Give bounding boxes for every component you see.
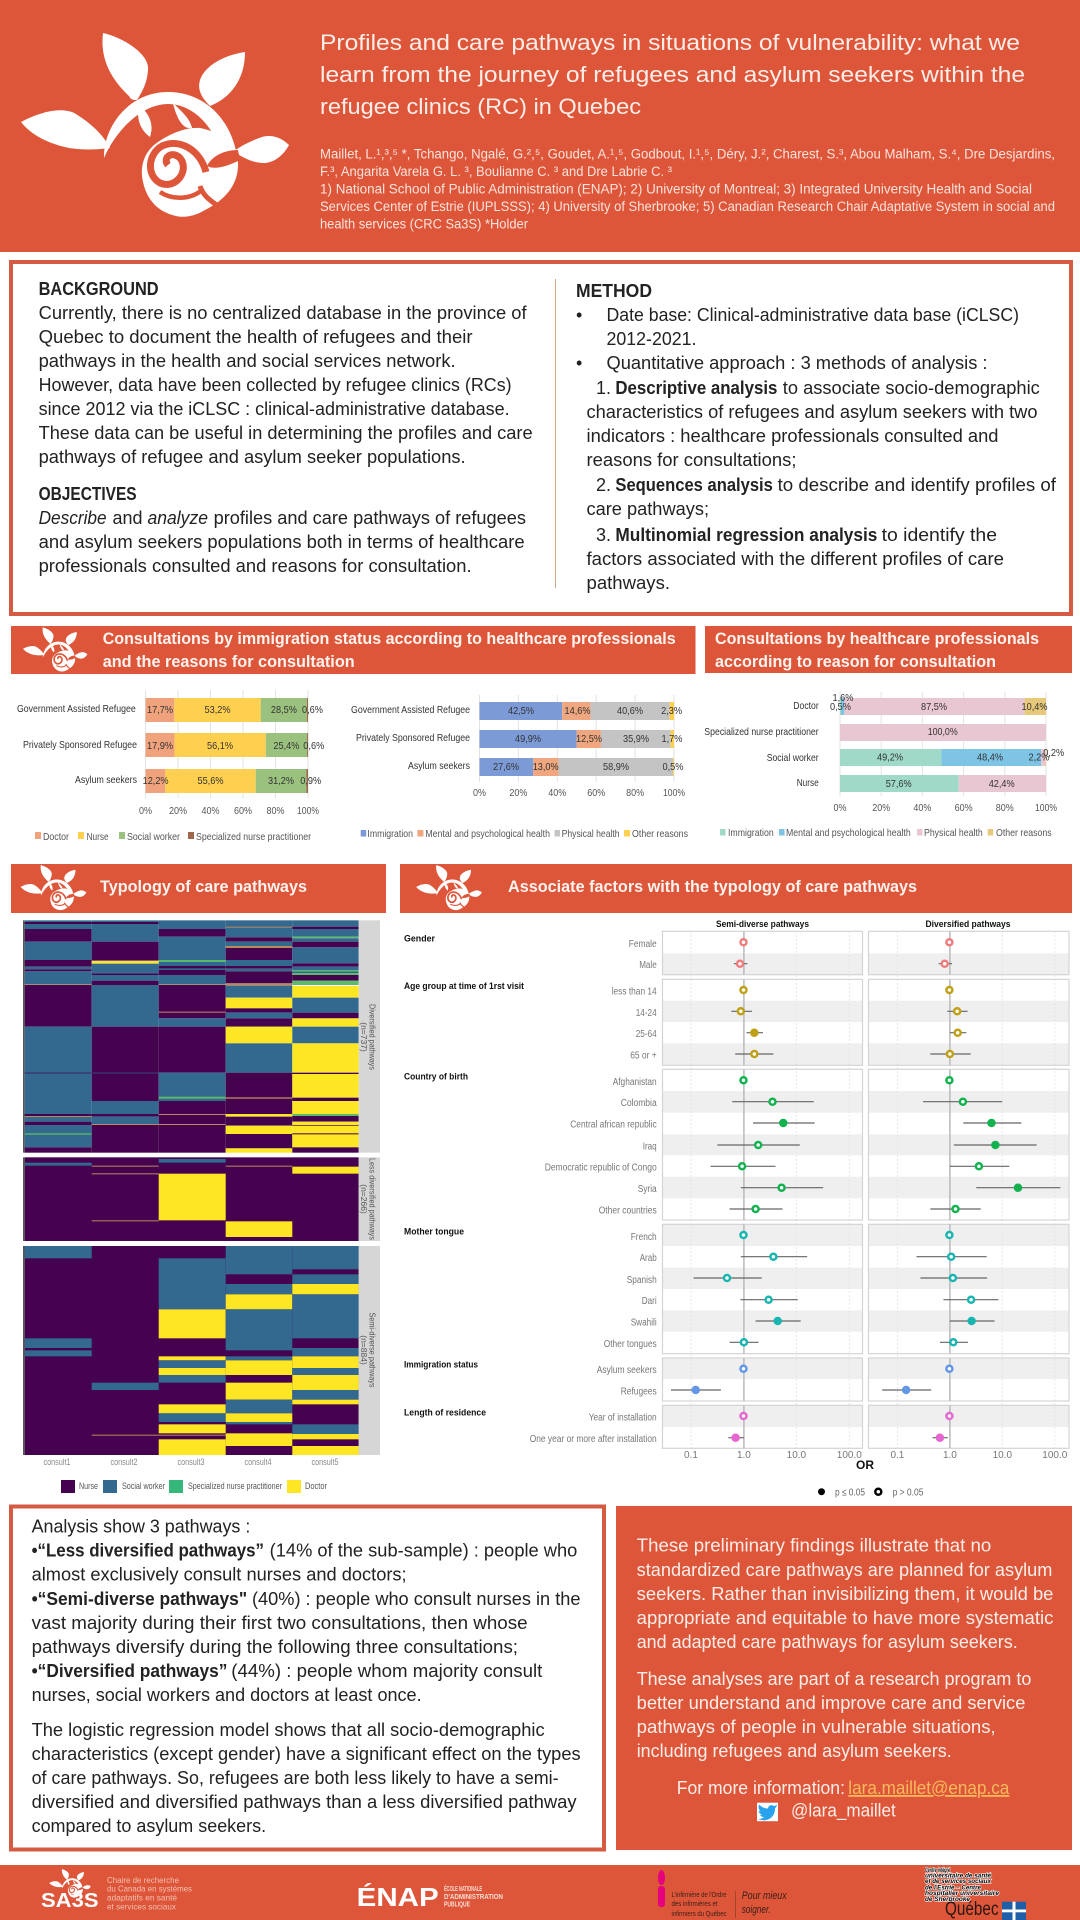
legend: Social worker (127, 831, 180, 843)
heatmap legend: Nurse (79, 1481, 98, 1492)
bar chart: healthcare professional by reason for consultation: 100% (1035, 802, 1057, 814)
significance legend: p ≤ 0.05 (835, 1488, 865, 1499)
text block: preliminary findings: appropriate and equitable to have more systematic (637, 1608, 1053, 1628)
bar chart: healthcare professional by reason for consultation: 48,4% (977, 752, 1003, 764)
group headings: Length of residence (404, 1407, 486, 1418)
row labels (530, 939, 657, 1445)
bar chart: immigration status by healthcare professional: 12,2% (143, 775, 169, 787)
authors and affiliations: 1) National School of Public Administration (ENAP); 2) University of Montreal; 3) Integrated University Health and Social (320, 182, 1032, 196)
logo: nurses order: infirmiers du Québec (672, 1909, 727, 1918)
points: gender (737, 939, 952, 967)
chart: forest plot of associate factors (404, 919, 1069, 1499)
x axis labels: consult1 (44, 1457, 70, 1468)
text block: regression result: compared to asylum seekers. (32, 1816, 266, 1836)
group headings: Immigration status (404, 1360, 478, 1371)
bar chart: immigration status by healthcare professional: 17,7% (147, 704, 173, 716)
logo: CIUSSS de l'Estrie and Quebec: et de services sociaux (925, 1878, 991, 1885)
text block: objectives: profiles and care pathways of refugees (214, 508, 526, 528)
icon: Quebec flag (1002, 1902, 1026, 1920)
text block: background: pathways in the health and social services network. (39, 351, 456, 371)
points: age group (738, 987, 961, 1057)
row labels: Female (629, 939, 657, 950)
text block: three pathways: •“Semi-diverse pathways" (32, 1589, 247, 1609)
logo: ENAP (357, 1882, 503, 1912)
bar chart: immigration status by healthcare professional: 80% (266, 805, 284, 817)
bar chart: healthcare professional by reason for consultation: 57,6% (886, 778, 912, 790)
bar chart: immigration status by reason for consultation: 12,5% (576, 733, 602, 745)
heatmap legend (61, 1480, 327, 1493)
error bars (671, 964, 1060, 1438)
icon: logo small (416, 865, 482, 910)
x axis: 100.0 (837, 1450, 862, 1461)
heading: consultations by healthcare professionals: according to reason for consultation (715, 653, 996, 671)
row labels: One year or more after installation (530, 1434, 657, 1445)
heading: consultations by immigration status (11, 626, 696, 674)
logo: SA3S chair: Chaire de recherche (107, 1875, 179, 1885)
bar chart: immigration status by healthcare professional: 0,6% (303, 740, 324, 752)
bar chart: healthcare professional by reason for consultation: 0% (834, 802, 846, 814)
x axis labels: consult5 (312, 1457, 338, 1468)
bar chart: healthcare professional by reason for consultation: 20% (872, 802, 890, 814)
text block: three pathways (32, 1517, 581, 1705)
authors and affiliations: health services (CRC Sa3S) *Holder (320, 216, 528, 232)
row labels: Asylum seekers (597, 1365, 657, 1376)
authors and affiliations: Maillet, L.¹,³,⁵ *, Tchango, Ngalé, G.²,⁵, Goudet, A.¹,⁵, Godbout, I.¹,⁵, Déry, J.², Charest, S.³, Abou Malham, S.⁴, Dre Desjardins, (320, 146, 1055, 162)
row labels: Central african republic (570, 1120, 657, 1130)
logo: ENAP: PUBLIQUE (444, 1902, 470, 1908)
text block: three pathways: nurses, social workers and doctors at least once. (32, 1685, 422, 1705)
bar chart: immigration status by healthcare professional: 0,6% (302, 704, 323, 716)
title (320, 30, 1025, 119)
bar chart: immigration status by reason for consultation: 60% (587, 787, 605, 799)
points: country of birth (739, 1077, 1021, 1212)
row labels: Democratic republic of Congo (545, 1162, 657, 1174)
heatmap panel: less diversified pathways (23, 1157, 380, 1241)
strip labels: (n=266) (359, 1184, 369, 1214)
bar chart: healthcare professional by reason for consultation: Specialized nurse practitioner (704, 726, 819, 738)
text block: method: pathways. (586, 573, 670, 593)
text block: method: 2. (596, 475, 611, 495)
strip labels: Semi-diverse pathways (368, 1312, 378, 1388)
bar chart: immigration status by healthcare professional: 20% (169, 805, 187, 817)
text block: regression result: The logistic regression model shows that all socio-demographic (32, 1720, 545, 1740)
authors and affiliations: F.³, Angarita Varela G. L. ³, Boulianne C. ³ and Dre Labrie C. ³ (320, 164, 672, 179)
bar chart: immigration status by healthcare professional: Privately Sponsored Refugee (23, 739, 137, 751)
text block: method: to identify the (882, 525, 997, 545)
row labels: Other countries (599, 1206, 657, 1216)
x axis: 10.0 (787, 1450, 807, 1461)
bar chart: immigration status by healthcare professional: 17,9% (147, 740, 173, 752)
panel titles: Semi-diverse pathways (716, 919, 809, 930)
x axis: 100.0 (1042, 1450, 1068, 1461)
bar chart: immigration status by healthcare professional: Government Assisted Refugee (17, 703, 136, 715)
logo: ENAP: ÉNAP (357, 1882, 439, 1912)
bar chart: healthcare professional by reason for consultation: 80% (996, 802, 1014, 814)
heatmap panel: semi-diverse pathways (23, 1246, 380, 1455)
title: learn from the journey of refugees and asylum seekers within the (320, 62, 1025, 87)
text block: three pathways: •“Diversified pathways” (32, 1661, 227, 1681)
logo: nurses order: L'infirmière de l'Ordre (672, 1890, 726, 1899)
text block: research program (637, 1669, 1031, 1761)
text block: method: to associate socio-demographic (783, 378, 1040, 398)
bar chart: healthcare professional by reason for consultation: 49,2% (877, 752, 903, 764)
heading: consultations by healthcare professionals (705, 626, 1072, 673)
logo: nurses order (658, 1870, 787, 1918)
text block: three pathways: (40%) : people who consult nurses in the (252, 1589, 580, 1609)
text block: method: characteristics of refugees and asylum seekers with two (586, 402, 1038, 422)
heatmap legend: Social worker (122, 1481, 165, 1492)
significance legend: p > 0.05 (893, 1488, 924, 1499)
legend: Specialized nurse practitioner (196, 831, 311, 843)
text block: preliminary findings: seekers. Rather than invisibilizing them, it would be (637, 1584, 1053, 1604)
bar chart: immigration status by reason for consultation: 40% (548, 787, 566, 799)
text block: method: • (576, 353, 582, 373)
bar chart: healthcare professional by reason for consultation: 100,0% (928, 726, 958, 738)
bar chart: immigration status by reason for consultation: 49,9% (515, 733, 541, 745)
legend: Mental and psychological health (425, 828, 550, 840)
bar chart: healthcare professional by reason for consultation (704, 692, 1064, 839)
text block: three pathways: Analysis show 3 pathways : (32, 1517, 250, 1537)
bar chart: immigration status by reason for consultation: 1,7% (662, 733, 682, 745)
strip labels (359, 1004, 378, 1388)
bar chart: immigration status by reason for consultation: Asylum seekers (408, 760, 470, 772)
panel: conclusions (616, 1506, 1072, 1850)
row labels: Syria (638, 1184, 657, 1195)
bar chart: immigration status by reason for consultation: 100% (663, 787, 685, 799)
bar chart: immigration status by healthcare professional: 56,1% (207, 740, 233, 752)
row labels: 14-24 (636, 1008, 657, 1019)
bar chart: immigration status by healthcare professional: 53,2% (204, 704, 230, 716)
axis title: OR (856, 1458, 874, 1472)
bar chart: immigration status by healthcare professional: 55,6% (198, 775, 224, 787)
legend (35, 831, 311, 843)
text block: method: • (576, 305, 582, 325)
text block: three pathways: •“Less diversified pathways” (32, 1541, 264, 1561)
authors and affiliations (320, 146, 1055, 232)
bar chart: healthcare professional by reason for consultation: Doctor (793, 700, 819, 712)
heading: typology of care pathways (11, 864, 386, 913)
bar chart: healthcare professional by reason for consultation: 1,6% (832, 692, 854, 704)
panel titles (716, 919, 1010, 930)
heading: associate factors: Associate factors with the typology of care pathways (508, 878, 917, 896)
chart: sequence heatmap of care pathways (23, 920, 380, 1493)
logo: CIUSSS de l'Estrie and Quebec: Centre intégré (925, 1867, 950, 1874)
text block: preliminary findings (637, 1536, 1053, 1652)
significance legend (818, 1488, 924, 1499)
legend: Physical health (562, 828, 620, 840)
footer band (0, 1865, 1080, 1920)
logo: CIUSSS de l'Estrie and Quebec: universitaire de santé (925, 1872, 991, 1880)
text block: objectives: analyze (148, 508, 208, 528)
row labels: 65 or + (630, 1050, 657, 1062)
row labels: Male (639, 960, 657, 971)
text block: method (576, 281, 1057, 593)
text block: objectives: and (112, 508, 142, 528)
logo: ENAP: D'ADMINISTRATION (444, 1894, 503, 1901)
bar chart: immigration status by healthcare professional: 0% (139, 805, 152, 817)
bar chart: immigration status by reason for consultation: 58,9% (603, 761, 629, 773)
text block: regression result: diversified and diversified pathways than a less diversified pathway (32, 1792, 577, 1812)
text block: regression result (32, 1720, 581, 1836)
logo: CIUSSS de l'Estrie and Quebec (925, 1867, 1026, 1920)
bar chart: healthcare professional by reason for consultation: Nurse (797, 777, 819, 789)
legend: Immigration (367, 828, 413, 840)
heatmap panel: diversified pathways (23, 920, 380, 1153)
group headings: Age group at time of 1rst visit (404, 981, 525, 992)
strip labels: (n=737) (359, 1022, 369, 1052)
bar chart: immigration status by reason for consultation: 35,9% (623, 733, 649, 745)
logo: CIUSSS de l'Estrie and Quebec: de Sherbrooke (925, 1896, 970, 1903)
text block: method: 1. (596, 378, 611, 398)
points: immigration status (693, 1366, 952, 1393)
bar chart: immigration status by reason for consultation: Government Assisted Refugee (351, 704, 470, 716)
text block: method: factors associated with the different profiles of care (586, 549, 1004, 569)
bar chart: immigration status by reason for consultation: 42,5% (508, 705, 534, 717)
text block: method: Sequences analysis (615, 475, 773, 495)
legend: Mental and psychological health (786, 827, 911, 839)
logo: CIUSSS de l'Estrie and Quebec: hospitalier universitaire (925, 1890, 999, 1897)
bar chart: healthcare professional by reason for consultation: 42,4% (989, 778, 1015, 790)
row labels: Swahili (631, 1318, 657, 1328)
text block: three pathways: (44%) : people whom majority consult (231, 1661, 542, 1681)
bar chart: healthcare professional by reason for consultation: 2,2% (1028, 752, 1050, 764)
bar chart: healthcare professional by reason for consultation: 87,5% (921, 701, 947, 713)
bar chart: immigration status by healthcare professional: Asylum seekers (75, 774, 137, 786)
text block: method: to describe and identify profiles of (778, 475, 1057, 495)
strip labels: (n=884) (359, 1335, 369, 1365)
panel: analysis results (11, 1506, 604, 1850)
logo: SA3S chair: SA3S (41, 1890, 98, 1912)
text block: method: Descriptive analysis (615, 378, 777, 398)
text block: three pathways: almost exclusively consult nurses and doctors; (32, 1565, 407, 1585)
x axis labels: consult2 (110, 1457, 138, 1468)
authors and affiliations: Services Center of Estrie (IUPLSSS); 4) University of Sherbrooke; 5) Canadian Research Chair Adaptative System in social and (320, 199, 1055, 214)
text block: background: pathways of refugee and asylum seeker populations. (39, 447, 466, 467)
x axis: 0.1 (890, 1450, 905, 1461)
bar chart: immigration status by healthcare professional: 28,5% (271, 704, 297, 716)
header banner (0, 0, 1080, 252)
icon: logo small (21, 865, 86, 910)
text block: research program: better understand and improve care and service (637, 1693, 1025, 1713)
legend: Immigration (728, 827, 774, 839)
bar chart: healthcare professional by reason for consultation: 0,2% (1043, 747, 1064, 759)
group headings: Mother tongue (404, 1227, 464, 1238)
text block: method: indicators : healthcare professionals consulted and (586, 426, 998, 446)
bar chart: immigration status by healthcare professional: 25,4% (273, 740, 299, 752)
legend: Physical health (924, 827, 983, 839)
bar chart: immigration status by reason for consultation: Privately Sponsored Refugee (356, 732, 470, 744)
icon: twitter bird (757, 1803, 778, 1821)
bar chart: healthcare professional by reason for consultation: Social worker (767, 752, 819, 764)
points: mother tongue (724, 1232, 975, 1345)
row labels: Other tongues (604, 1339, 657, 1350)
text block: background (39, 279, 533, 467)
x axis labels: consult4 (244, 1457, 272, 1468)
contact information: lara.maillet@enap.ca (848, 1778, 1010, 1798)
bar chart: healthcare professional by reason for consultation: 40% (913, 802, 931, 814)
text block: regression result: characteristics (except gender) have a significant effect on the types (32, 1744, 581, 1764)
text block: background: Currently, there is no centralized database in the province of (39, 303, 528, 323)
group headings: Country of birth (404, 1071, 468, 1082)
heatmap legend: Specialized nurse practitioner (188, 1481, 282, 1492)
logo: nurses order: Pour mieux (742, 1890, 787, 1902)
text block: three pathways: vast majority during their first two consultations, then whose (32, 1613, 528, 1633)
strip labels: Less diversified pathways (368, 1158, 378, 1240)
contact information: @lara_maillet (791, 1801, 896, 1822)
title: refugee clinics (RC) in Quebec (320, 94, 641, 119)
text block: method: Quantitative approach : 3 methods of analysis : (606, 353, 988, 373)
row labels: Iraq (643, 1142, 657, 1152)
bar chart: immigration status by healthcare professional (17, 690, 324, 843)
logo: SA3S chair: adaptatifs en santé (107, 1892, 177, 1902)
bar chart: immigration status by healthcare professional: 60% (234, 805, 252, 817)
x axis: 1.0 (943, 1450, 957, 1461)
text block: research program: These analyses are part of a research program to (637, 1669, 1031, 1689)
text block: three pathways: (14% of the sub-sample) : people who (270, 1541, 577, 1561)
bar chart: immigration status by reason for consultation: 0,5% (662, 761, 684, 773)
legend (720, 827, 1052, 839)
row labels: less than 14 (612, 986, 657, 998)
row labels: Colombia (621, 1098, 657, 1109)
text block: method: METHOD (576, 281, 652, 301)
bar chart: immigration status by reason for consultation: 20% (509, 787, 527, 799)
bar chart: immigration status by healthcare professional: 31,2% (268, 775, 294, 787)
bar chart: healthcare professional by reason for consultation: 60% (955, 802, 973, 814)
bar chart: immigration status by reason for consultation (351, 695, 688, 840)
text block: method: Multinomial regression analysis (615, 525, 877, 545)
legend (361, 828, 688, 840)
row labels: Year of installation (589, 1412, 657, 1424)
heading: associate factors (400, 864, 1072, 913)
text block: three pathways: pathways diversify during the following three consultations; (32, 1637, 518, 1657)
panel titles: Diversified pathways (926, 919, 1010, 930)
x axis: 0.1 (684, 1450, 698, 1461)
heading: typology of care pathways: Typology of care pathways (100, 878, 307, 896)
x axis: 1.0 (737, 1450, 751, 1461)
title: Profiles and care pathways in situations of vulnerability: what we (320, 30, 1020, 55)
logo: SA3S chair (41, 1869, 192, 1912)
logo: nurses order: des infirmières et (672, 1899, 718, 1908)
icon: logo small (23, 627, 87, 672)
heading: consultations by healthcare professionals: Consultations by healthcare professionals (715, 630, 1039, 648)
heading: consultations by immigration status: and the reasons for consultation (103, 653, 355, 671)
text block: objectives (39, 484, 526, 576)
x axis (684, 1450, 1068, 1461)
text block: method: Date base: Clinical-administrative data base (iCLSC) (606, 305, 1019, 325)
bar chart: immigration status by reason for consultation: 40,6% (617, 705, 643, 717)
text block: objectives: and asylum seekers populations both in terms of healthcare (39, 532, 525, 552)
bar chart: immigration status by reason for consultation: 2,3% (661, 705, 682, 717)
row labels: 25-64 (636, 1029, 657, 1040)
panel: background, objectives and method (11, 262, 1071, 614)
bar chart: immigration status by healthcare professional: 40% (202, 805, 220, 817)
text block: objectives: OBJECTIVES (39, 484, 137, 504)
row labels: Dari (642, 1296, 657, 1307)
text block: preliminary findings: These preliminary findings illustrate that no (637, 1536, 991, 1556)
heading: consultations by immigration status: Consultations by immigration status according to healthcare professionals (103, 630, 676, 648)
logo: ENAP: ÉCOLE NATIONALE (444, 1884, 482, 1893)
text block: method: reasons for consultations; (586, 450, 796, 470)
logo: nurses order: soigner. (742, 1904, 771, 1916)
group headings (404, 934, 525, 1418)
text block: background: BACKGROUND (39, 279, 159, 299)
bar chart: immigration status by healthcare professional: 0,9% (300, 775, 321, 787)
row labels: French (631, 1232, 657, 1243)
text block: objectives: professionals consulted and reasons for consultation. (39, 556, 472, 576)
legend: Doctor (43, 831, 69, 843)
legend: Other reasons (632, 828, 688, 840)
icon: spiral flower logo (21, 33, 289, 217)
bar chart: immigration status by healthcare professional: 100% (297, 805, 319, 817)
row labels: Afghanistan (613, 1077, 657, 1088)
bar chart: immigration status by reason for consultation: 0% (473, 787, 486, 799)
row labels: Spanish (627, 1275, 657, 1286)
logo: CIUSSS de l'Estrie and Quebec: de l'Estrie – Centre (925, 1884, 981, 1892)
text block: background: Quebec to document the health of refugees and their (39, 327, 473, 347)
group headings: Gender (404, 934, 435, 945)
text block: background: These data can be useful in determining the profiles and care (39, 423, 533, 443)
bar chart: immigration status by reason for consultation: 13,0% (533, 761, 559, 773)
strip labels: Diversified pathways (368, 1004, 378, 1070)
legend: Other reasons (996, 827, 1052, 839)
bar chart: immigration status by reason for consultation: 27,6% (493, 761, 519, 773)
text block: research program: including refugees and asylum seekers. (637, 1741, 952, 1761)
logo: SA3S chair: du Canada en systèmes (107, 1884, 192, 1894)
text block: method: 2012-2021. (606, 329, 696, 349)
text block: method: 3. (596, 525, 611, 545)
text block: background: However, data have been collected by refugee clinics (RCs) (39, 375, 512, 395)
row labels: Refugees (621, 1386, 657, 1398)
contact information: For more information: (677, 1778, 845, 1798)
bar chart: healthcare professional by reason for consultation: 10,4% (1022, 701, 1048, 713)
contact information (677, 1778, 1010, 1822)
heatmap legend: Doctor (305, 1481, 327, 1492)
logo: SA3S chair: et services sociaux (107, 1902, 177, 1912)
text block: objectives: Describe (39, 508, 107, 528)
bar chart: healthcare professional by reason for consultation: 0,5% (830, 701, 851, 713)
legend: Nurse (87, 831, 109, 843)
row shading (662, 953, 1069, 1427)
x axis labels (44, 1457, 338, 1468)
bar chart: immigration status by reason for consultation: 80% (626, 787, 644, 799)
x axis labels: consult3 (178, 1457, 204, 1468)
text block: method: care pathways; (586, 499, 709, 519)
text block: research program: pathways of people in vulnerable situations, (637, 1717, 996, 1737)
bar chart: immigration status by reason for consultation: 14,6% (564, 705, 590, 717)
text block: background: since 2012 via the iCLSC : clinical-administrative database. (39, 399, 510, 419)
text block: regression result: of care pathways. So, refugees are both less likely to have a semi- (32, 1768, 559, 1788)
logo: CIUSSS de l'Estrie and Quebec: Québec (945, 1899, 999, 1920)
text block: preliminary findings: standardized care pathways are planned for asylum (637, 1560, 1052, 1580)
row labels: Arab (640, 1253, 657, 1264)
text block: preliminary findings: and adapted care pathways for asylum seekers. (637, 1632, 1018, 1652)
points: length of residence (733, 1413, 952, 1441)
x axis: 10.0 (993, 1450, 1012, 1461)
